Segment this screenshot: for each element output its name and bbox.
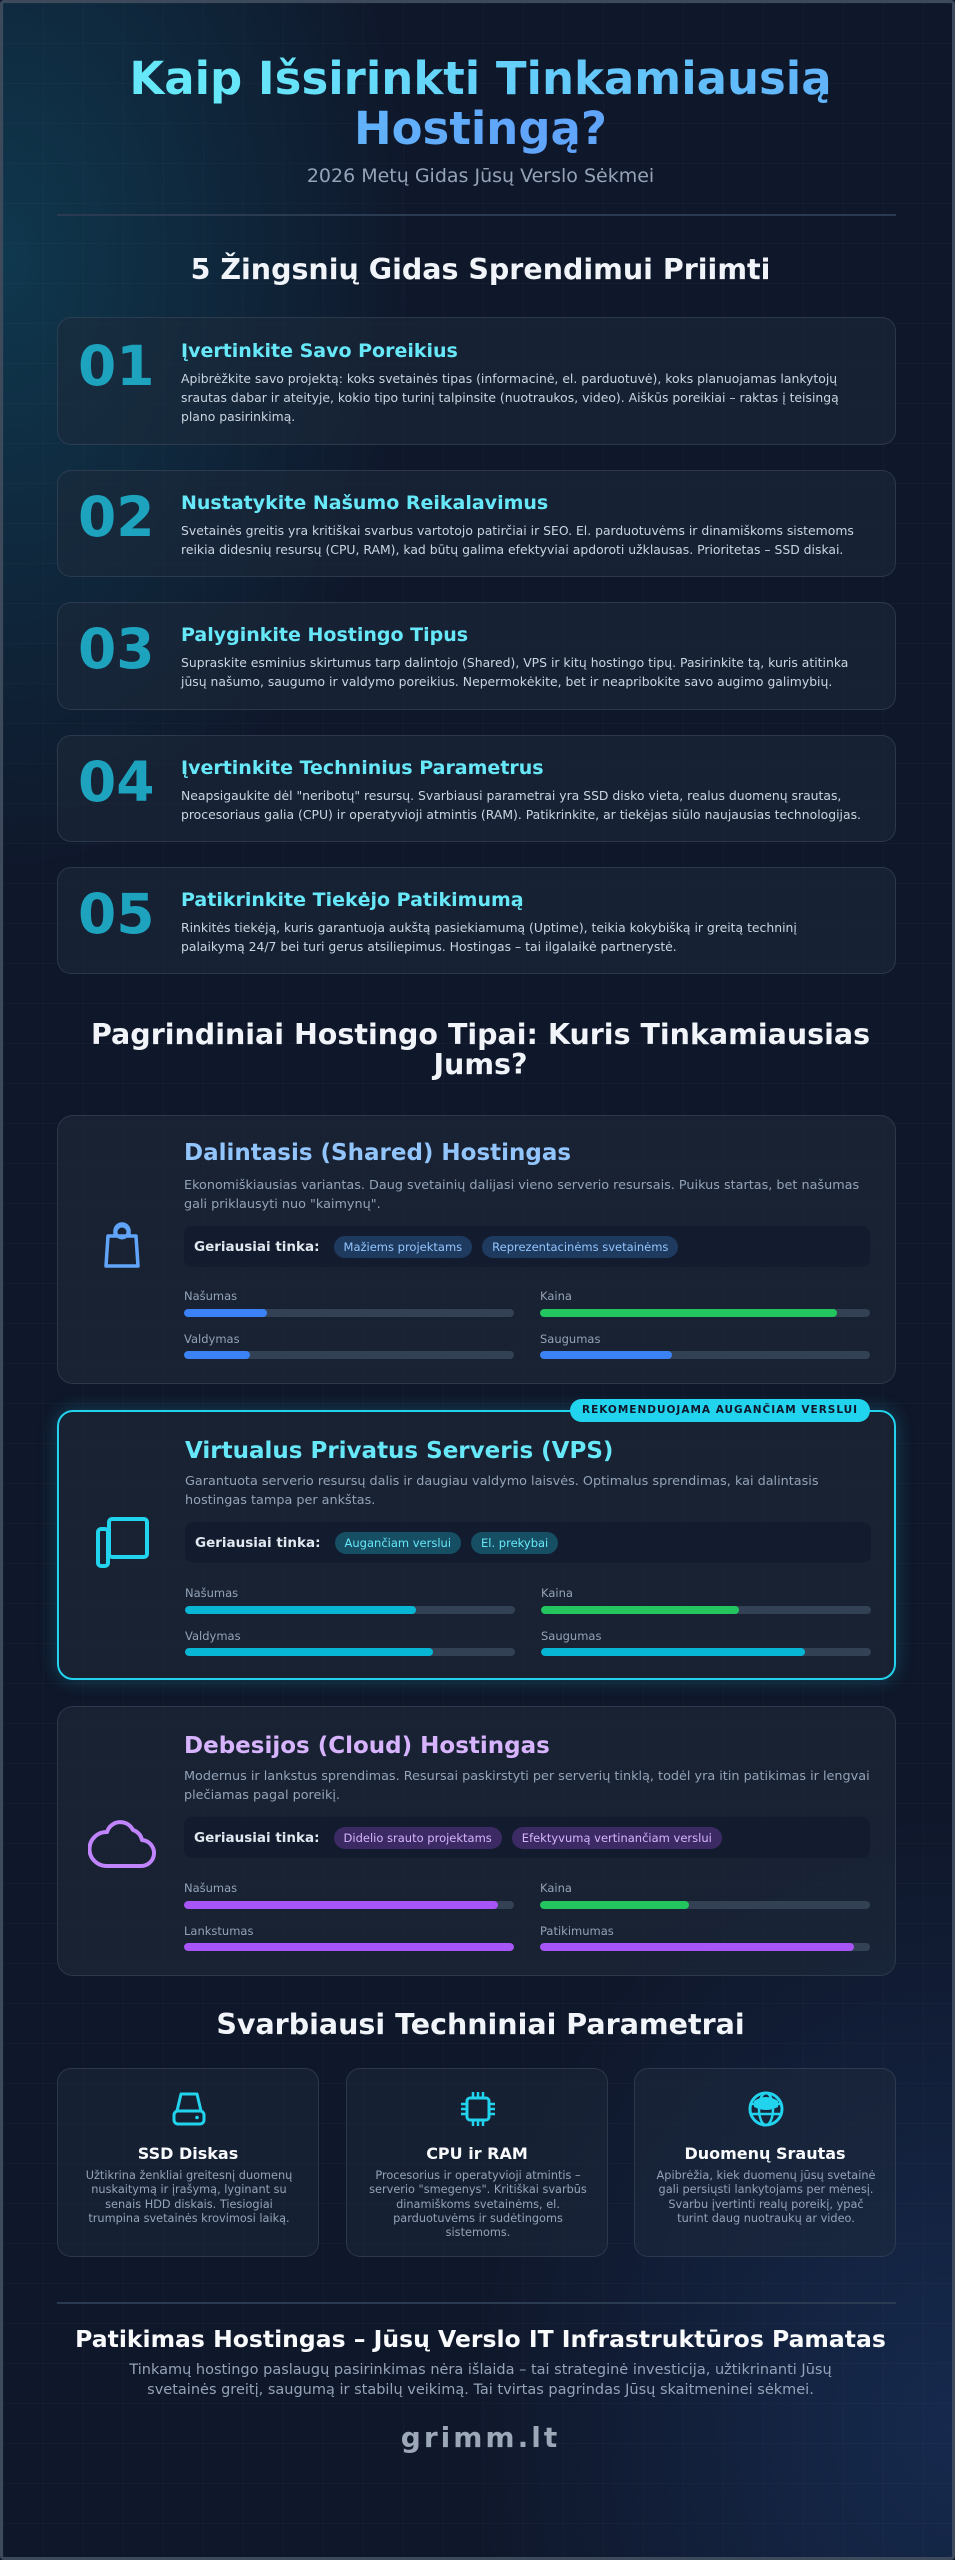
card: SSD <box>57 2068 319 2257</box>
icon: disk <box>172 2092 206 2126</box>
heading: Debesijos (Cloud) Hostingas <box>184 1733 550 1759</box>
panel: shared hosting: Saugumas <box>540 1332 600 1346</box>
step 03: Supraskite esminius skirtumus tarp dalintojo (Shared), VPS ir kitų hostingo tipų. Pasirinkite tą, kuris atitinka jūsų našumo, saugumo ir valdymo poreikius. Nepermokėkite, bet ir neapribokite savo augimo galimybių. <box>181 655 848 689</box>
card: CPU: Procesorius ir operatyvioji atmintis – serverio "smegenys". Kritiškai svarbūs dinamiškoms svetainėms, el. parduotuvėms ir sudėtingoms sistemoms. <box>369 2169 587 2239</box>
footer heading: Patikimas Hostingas – Jūsų Verslo IT Infrastruktūros Pamatas <box>75 2325 886 2353</box>
heading: hosting types: Pagrindiniai Hostingo Tipai: Kuris Tinkamiausias Jums? <box>91 1018 870 1081</box>
step 02 <box>57 470 896 577</box>
panel: cloud hosting: Kaina <box>540 1881 572 1895</box>
card: bandwidth <box>634 2068 896 2257</box>
step 05: Rinkitės tiekėją, kuris garantuoja aukštą pasiekiamumą (Uptime), teikia kokybišką ir greitą techninį <box>181 920 797 935</box>
heading: 5 steps: 5 Žingsnių Gidas Sprendimui Priimti <box>191 253 770 286</box>
icon: cloud <box>88 1820 156 1868</box>
description: Ekonomiškiausias variantas. Daug svetainių dalijasi vieno serverio resursais. Puikus startas, bet našumas gali priklausyti nuo "kaimynų". <box>184 1178 859 1212</box>
best for tags <box>184 1226 870 1267</box>
panel: shared hosting: Kaina <box>540 1289 572 1303</box>
best for tags: Didelio srauto projektams <box>344 1830 492 1844</box>
card: SSD: Užtikrina ženkliai greitesnį duomenų nuskaitymą ir įrašymą, lyginant su senais HDD diskais. Tiesiogiai trumpina svetainės krovimosi laiką. <box>86 2169 292 2225</box>
best for tags: Efektyvumą vertinančiam verslui <box>522 1830 712 1844</box>
bars: Našumas <box>184 1881 237 1895</box>
best for tags <box>185 1522 871 1563</box>
panel: shared hosting: Valdymas <box>184 1332 240 1346</box>
badge: REKOMENDUOJAMA AUGANČIAM VERSLUI <box>582 1404 858 1416</box>
panel: cloud hosting <box>57 1706 896 1976</box>
description: Modernus ir lankstus sprendimas. Resursai paskirstyti per serverių tinklą, todėl yra itin patikimas ir lengvai plečiamas pagal poreikį. <box>184 1769 870 1803</box>
best for tags: Geriausiai tinka: <box>195 1534 321 1550</box>
card: CPU <box>346 2068 608 2257</box>
heading: Virtualus Privatus Serveris (VPS) <box>185 1438 613 1464</box>
best for tags: Geriausiai tinka: <box>194 1830 320 1846</box>
best for tags: Geriausiai tinka: <box>194 1238 320 1254</box>
title: Kaip Išsirinkti Tinkamiausią <box>129 52 832 105</box>
best for tags: Mažiems projektams <box>344 1240 462 1254</box>
step 01: Apibrėžkite savo projektą: koks svetainės tipas (informacinė, el. parduotuvė), koks planuojamas lankytojų srautas dabar ir ateityje, kokio tipo turinį talpinsite (nuotraukos, video). Aiškūs poreikiai – raktas į teisingą plano pasirinkimą. <box>181 371 839 424</box>
step 02: Nustatykite Našumo Reikalavimus <box>181 492 548 514</box>
bars: Našumas <box>185 1586 238 1600</box>
step 04 <box>57 735 896 842</box>
step 03 <box>57 602 896 710</box>
card: bandwidth: Duomenų Srautas <box>684 2144 846 2163</box>
panel: shared hosting <box>57 1115 896 1384</box>
card: SSD: SSD Diskas <box>138 2144 238 2163</box>
panel: cloud hosting: Patikimumas <box>540 1924 614 1938</box>
bars: Našumas <box>184 1289 237 1303</box>
brand: grimm.lt <box>401 2421 560 2454</box>
icon: shopping bag <box>104 1222 140 1268</box>
step 04: Neapsigaukite dėl "neribotų" resursų. Svarbiausi parametrai yra SSD disko vieta, realus duomenų srautas, procesoriaus galia (CPU) ir operatyvioji atmintis (RAM). Patikrinkite, ar tiekėjas siūlo naujausias technologijas. <box>181 788 861 822</box>
card: bandwidth: Apibrėžia, kiek duomenų jūsų svetainė gali persiųsti lankytojams per mėnesį. Svarbu įvertinti realų poreikį, ypač turint daug nuotraukų ar video. <box>657 2169 875 2225</box>
subtitle: 2026 Metų Gidas Jūsų Verslo Sėkmei <box>307 165 654 187</box>
title: Hostingą? <box>354 102 607 155</box>
step 03: Palyginkite Hostingo Tipus <box>181 624 468 646</box>
best for tags <box>184 1817 870 1858</box>
panel: VPS (recommended): Kaina <box>541 1586 573 1600</box>
step 01: 01 <box>78 334 155 398</box>
step 01 <box>57 317 896 445</box>
icon: server windows <box>96 1517 149 1568</box>
step 05: palaikymą 24/7 bei turi gerus atsiliepimus. Hostingas – tai ilgalaikė partnerystė. <box>181 939 677 954</box>
heading: Dalintasis (Shared) Hostingas <box>184 1140 571 1166</box>
icon: globe <box>748 2092 784 2126</box>
step 01: Įvertinkite Savo Poreikius <box>181 340 458 362</box>
panel: VPS (recommended): Saugumas <box>541 1629 601 1643</box>
step 04: Įvertinkite Techninius Parametrus <box>181 757 544 779</box>
panel: VPS (recommended) <box>57 1410 896 1680</box>
step 04: 04 <box>78 750 155 814</box>
badge <box>570 1399 870 1422</box>
footer text: Tinkamų hostingo paslaugų pasirinkimas nėra išlaida – tai strateginė investicija, užtikrinanti Jūsų svetainės greitį, saugumą ir stabilų veikimą. Tai tvirtas pagrindas Jūsų skaitmeninei sėkmei. <box>129 2362 832 2398</box>
step 03: 03 <box>78 617 155 681</box>
heading: technical parameters: Svarbiausi Techniniai Parametrai <box>216 2008 745 2041</box>
best for tags: El. prekybai <box>481 1536 548 1550</box>
title <box>129 52 832 155</box>
step 05: 05 <box>78 882 155 946</box>
step 05 <box>57 867 896 974</box>
best for tags: Reprezentacinėms svetainėms <box>492 1240 668 1254</box>
description: Garantuota serverio resursų dalis ir daugiau valdymo laisvės. Optimalus sprendimas, kai dalintasis hostingas tampa per ankštas. <box>185 1474 819 1508</box>
step 02: 02 <box>78 485 155 549</box>
step 02: Svetainės greitis yra kritiškai svarbus vartotojo patirčiai ir SEO. El. parduotuvėms ir dinamiškoms sistemoms reikia didesnių resursų (CPU, RAM), kad būtų galima efektyviai apdoroti užklausas. Prioritetas – SSD diskai. <box>181 523 854 557</box>
card: CPU: CPU ir RAM <box>426 2144 528 2163</box>
best for tags: Augančiam verslui <box>345 1536 451 1550</box>
panel: cloud hosting: Lankstumas <box>184 1924 253 1938</box>
step 05: Patikrinkite Tiekėjo Patikimumą <box>181 889 524 911</box>
icon: chip <box>461 2092 495 2126</box>
panel: VPS (recommended): Valdymas <box>185 1629 241 1643</box>
